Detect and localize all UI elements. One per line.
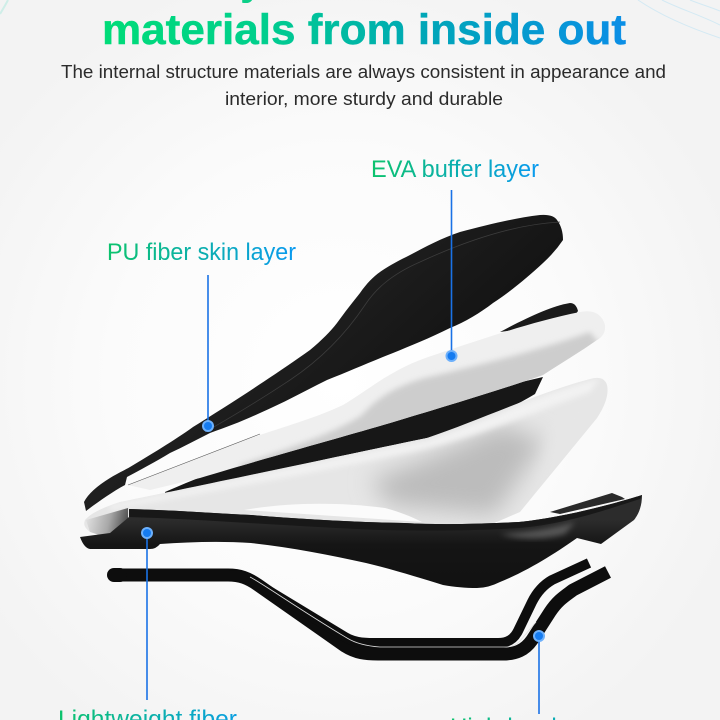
PU fiber skin layer <box>84 215 563 511</box>
subtitle <box>61 61 666 109</box>
lower white layer <box>84 378 608 536</box>
label: PU fiber skin layer: PU fiber skin layer <box>107 239 296 266</box>
subtitle: interior, more sturdy and durable <box>225 88 503 109</box>
decorative wave lines <box>0 0 720 38</box>
saddle exploded view <box>80 215 642 654</box>
label: PU fiber skin layer <box>107 239 296 432</box>
label: EVA buffer layer <box>371 156 539 362</box>
rails <box>114 563 608 654</box>
gap under the lower layer <box>244 504 422 522</box>
EVA buffer layer <box>128 311 605 490</box>
subtitle: The internal structure materials are always consistent in appearance and <box>61 61 666 82</box>
label: EVA buffer layer: EVA buffer layer <box>371 156 539 183</box>
title: materials from inside out <box>102 6 626 54</box>
black band under EVA layer <box>165 377 543 497</box>
label: lightweight fiber <box>58 527 237 720</box>
rear black edge behind EVA layer <box>500 303 578 332</box>
label: high-level rail <box>450 630 557 720</box>
bottom shell <box>80 493 642 588</box>
